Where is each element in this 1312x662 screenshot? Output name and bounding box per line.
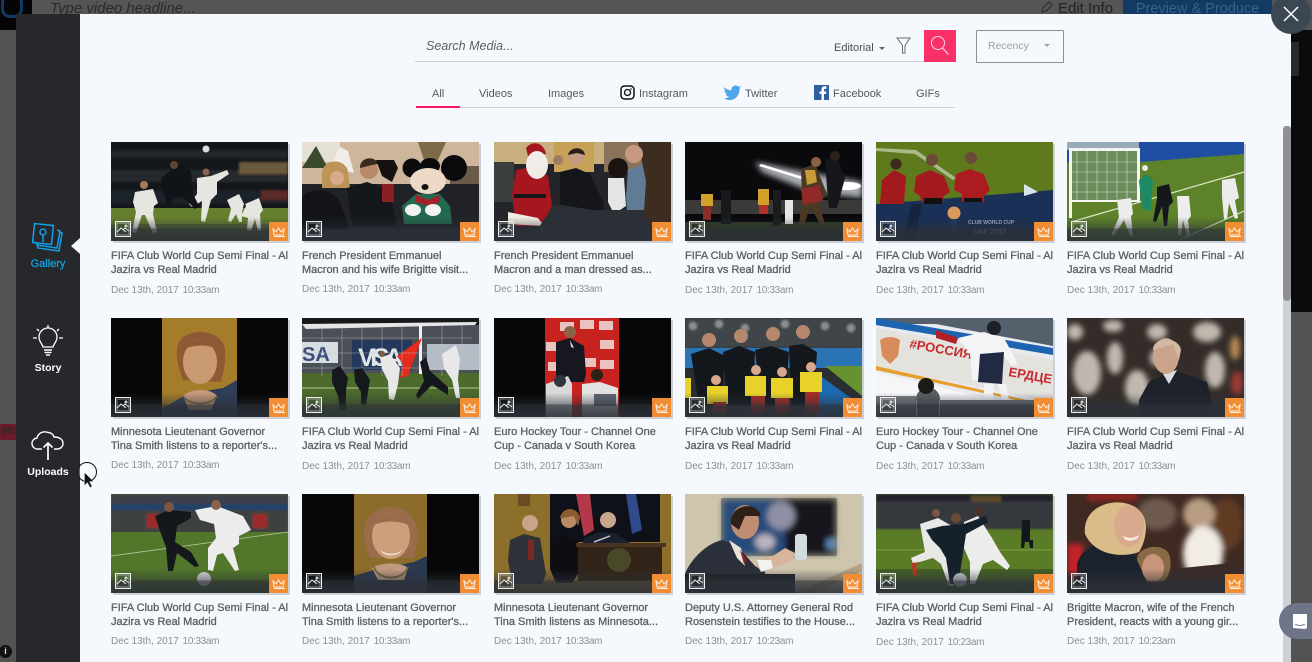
date: Dec 13th, 2017 10:23am [876, 637, 984, 648]
tab: twitter: Twitter [745, 88, 777, 100]
date: Dec 13th, 2017 10:33am [302, 636, 410, 647]
cursor highlight [76, 460, 100, 490]
title: President, reacts with a young gir... [1067, 616, 1238, 628]
title: Tina Smith listens as Minnesota... [494, 616, 658, 628]
title [876, 250, 1053, 276]
title: Jazira vs Real Madrid [685, 440, 791, 452]
title: Minnesota Lieutenant Governor [111, 426, 265, 438]
card: row 3 col 3 [494, 494, 675, 652]
editorial dropdown: Editorial [834, 42, 874, 54]
label: uploads: Uploads [27, 466, 69, 478]
title: Minnesota Lieutenant Governor [494, 602, 648, 614]
recency label: Recency [988, 40, 1029, 52]
date: Dec 13th, 2017 10:33am [111, 636, 219, 647]
thumbnail [494, 142, 671, 241]
recency caret [1044, 44, 1050, 47]
background info icon: i [4, 646, 7, 656]
card: row 2 col 2 [302, 318, 481, 472]
thumbnail [685, 142, 862, 241]
thumbnail [876, 318, 1053, 417]
thumbnail [1067, 494, 1244, 593]
title: Macron and a man dressed as... [494, 264, 652, 276]
title: FIFA Club World Cup Semi Final - Al [302, 426, 479, 438]
thumbnail [1067, 142, 1244, 241]
title: Jazira vs Real Madrid [111, 264, 217, 276]
thumbnail [685, 494, 862, 593]
title [685, 426, 862, 452]
card: row 1 col 5 [876, 142, 1055, 296]
active tab indicator [416, 106, 460, 108]
card: row 3 col 5 [876, 494, 1057, 652]
search placeholder: Search Media... [426, 39, 514, 53]
title: French President Emmanuel [302, 250, 441, 262]
thumbnail: #РОССИЯВМ [908, 336, 993, 365]
icon: instagram [620, 85, 635, 100]
thumbnail: UAE 2017 [974, 229, 1006, 236]
date: Dec 13th, 2017 10:33am [876, 285, 984, 296]
scrollbar thumb [1283, 126, 1291, 301]
date: Dec 13th, 2017 10:33am [685, 461, 793, 472]
background timestamp [0, 424, 16, 440]
scrollbar track [1283, 126, 1291, 662]
background right side [1291, 30, 1312, 312]
card: row 2 col 5 [876, 318, 1057, 476]
title [111, 426, 277, 452]
tab: gifs: GIFs [916, 88, 940, 100]
date: Dec 13th, 2017 10:33am [685, 285, 793, 296]
thumbnail [1067, 318, 1244, 417]
date: Dec 13th, 2017 10:23am [685, 636, 793, 647]
thumbnail: VISA [358, 344, 403, 372]
title: FIFA Club World Cup Semi Final - Al [1067, 250, 1244, 262]
sidebar [16, 14, 80, 662]
card: row 2 col 4 [685, 318, 864, 472]
title: Jazira vs Real Madrid [1067, 264, 1173, 276]
dropdown caret [879, 47, 885, 50]
icon: pencil [1042, 2, 1052, 12]
logo [0, 0, 32, 30]
icon: twitter [724, 86, 741, 100]
title [494, 601, 676, 629]
thumbnail [494, 494, 671, 593]
card: row 3 col 2 [302, 494, 483, 652]
title [302, 601, 484, 629]
card: row 1 col 6 [1067, 142, 1246, 296]
card: row 1 col 2 [302, 142, 481, 295]
card: row 3 col 4 [685, 494, 866, 652]
icon: filter [896, 38, 911, 54]
thumbnail [494, 318, 671, 417]
thumbnail: SA [302, 344, 330, 366]
card: row 2 col 1 [111, 318, 290, 471]
title [1067, 425, 1249, 453]
title: FIFA Club World Cup Semi Final - Al [685, 426, 862, 438]
thumbnail [111, 494, 288, 593]
title [685, 250, 862, 276]
icon: facebook [814, 85, 829, 100]
card: row 1 col 1 [111, 142, 290, 296]
title [1067, 601, 1249, 629]
title: French President Emmanuel [494, 250, 633, 262]
thumbnail [302, 142, 479, 241]
date: Dec 13th, 2017 10:33am [494, 284, 602, 295]
title [876, 601, 1058, 629]
chat widget [1279, 603, 1312, 639]
title: Brigitte Macron, wife of the French [1067, 602, 1235, 614]
thumbnail [876, 142, 1053, 241]
title: Jazira vs Real Madrid [685, 264, 791, 276]
title: FIFA Club World Cup Semi Final - Al [1067, 426, 1244, 438]
background editor top bar [0, 0, 1312, 14]
title [1067, 250, 1244, 276]
date: Dec 13th, 2017 10:33am [876, 461, 984, 472]
thumbnail: CLUB WORLD CUP [968, 220, 1015, 226]
title: Rosenstein testifies to the House... [685, 616, 855, 628]
search button [924, 30, 956, 62]
search field [415, 30, 925, 62]
tab: facebook: Facebook [833, 88, 881, 100]
icon: upload cloud [31, 431, 64, 460]
thumbnail [302, 318, 479, 417]
title: Euro Hockey Tour - Channel One [876, 426, 1038, 438]
title: FIFA Club World Cup Semi Final - Al [111, 602, 288, 614]
thumbnail [302, 494, 479, 593]
thumbnail: ЕРДЦЕ [1007, 364, 1053, 387]
tab: all: All [432, 88, 444, 100]
card: row 1 col 3 [494, 142, 673, 295]
title [685, 601, 867, 629]
title [302, 426, 479, 452]
date: Dec 13th, 2017 10:23am [1067, 636, 1175, 647]
title: FIFA Club World Cup Semi Final - Al [685, 250, 862, 262]
close button [1271, 0, 1312, 34]
date: Dec 13th, 2017 10:33am [1067, 285, 1175, 296]
recency dropdown [976, 30, 1064, 63]
title [111, 601, 293, 629]
icon: gallery [32, 222, 63, 252]
card: row 3 col 6 [1067, 494, 1248, 652]
title: Tina Smith listens to a reporter's... [111, 440, 277, 452]
date: Dec 13th, 2017 10:33am [1067, 461, 1175, 472]
title: FIFA Club World Cup Semi Final - Al [111, 250, 288, 262]
card: row 2 col 6 [1067, 318, 1248, 476]
date: Dec 13th, 2017 10:33am [111, 460, 219, 471]
date: Dec 13th, 2017 10:33am [302, 284, 410, 295]
date: Dec 13th, 2017 10:33am [302, 461, 410, 472]
thumbnail [111, 318, 288, 417]
title: Jazira vs Real Madrid [302, 440, 408, 452]
title: Cup - Canada v South Korea [876, 440, 1017, 452]
title: Cup - Canada v South Korea [494, 440, 635, 452]
title: FIFA Club World Cup Semi Final - Al [876, 250, 1053, 262]
title: Minnesota Lieutenant Governor [302, 602, 456, 614]
title [494, 426, 656, 452]
title [876, 425, 1058, 453]
date: Dec 13th, 2017 10:33am [494, 636, 602, 647]
date: Dec 13th, 2017 10:33am [111, 285, 219, 296]
title: Euro Hockey Tour - Channel One [494, 426, 656, 438]
thumbnail [876, 494, 1053, 593]
icon: story lightbulb [33, 325, 63, 356]
date: Dec 13th, 2017 10:33am [494, 461, 602, 472]
tab: instagram: Instagram [639, 88, 688, 100]
label: story: Story [35, 362, 61, 374]
title [494, 250, 652, 276]
title: Jazira vs Real Madrid [876, 616, 982, 628]
thumbnail [685, 318, 862, 417]
background info icon [0, 645, 12, 658]
card: row 3 col 1 [111, 494, 292, 652]
title: Deputy U.S. Attorney General Rod [685, 602, 853, 614]
card: row 1 col 4 [685, 142, 864, 296]
title: Tina Smith listens to a reporter's... [302, 616, 468, 628]
title: Jazira vs Real Madrid [1067, 440, 1173, 452]
title [111, 250, 288, 276]
label: gallery: Gallery [31, 258, 65, 270]
card: row 2 col 3 [494, 318, 673, 472]
title: Jazira vs Real Madrid [111, 616, 217, 628]
sidebar pointer [71, 238, 80, 254]
tab: videos: Videos [479, 88, 512, 100]
tab: images: Images [548, 88, 584, 100]
title: Macron and his wife Brigitte visit... [302, 264, 468, 276]
title: FIFA Club World Cup Semi Final - Al [876, 602, 1053, 614]
tabs [432, 85, 940, 100]
thumbnail [111, 142, 288, 241]
title [302, 250, 468, 276]
title: Jazira vs Real Madrid [876, 264, 982, 276]
